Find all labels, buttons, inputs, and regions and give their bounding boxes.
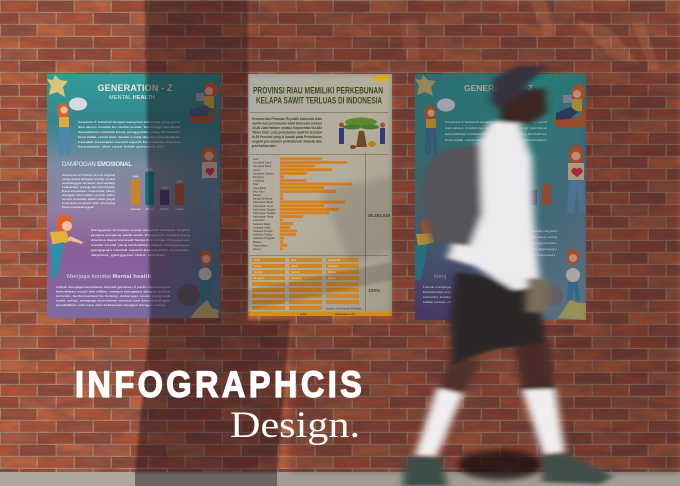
text block: social media: panjang yang (530, 235, 557, 239)
text block: social media: media negatif (530, 229, 557, 233)
subtitle: design: Design. (230, 405, 360, 446)
heading: dampak emosional: DAMPOGAN EMOSIONAL (62, 162, 132, 168)
table of percentages: Jambi (291, 265, 298, 268)
text block: social media (530, 229, 557, 257)
front leg (513, 340, 555, 392)
neck and face (497, 88, 547, 124)
horizontal bar chart: Papua (253, 247, 261, 251)
text block: intro: Tahun 2019. Luas perkebunan sawit ini tersebar (252, 130, 323, 134)
character: girl on sofa (188, 82, 218, 123)
character: girl thinking (424, 105, 438, 155)
text block: intro: Kementerian Pertanian Republik Indonesia telah (252, 117, 322, 121)
horizontal bar chart: Sumatera Barat (253, 164, 271, 168)
bar chart: 44% (146, 168, 153, 172)
icon: star bottom right (190, 300, 219, 318)
table of percentages: Kalimantan (328, 259, 341, 262)
right sock (522, 389, 565, 454)
bar chart: 20% (161, 186, 168, 190)
horizontal bar chart: Maluku (253, 240, 262, 244)
bar chart: Cemas (131, 207, 141, 211)
text block: intro: masalah kesehatan mental seperti kecemasan, depresi (78, 140, 180, 144)
text block: emotional impact: sehingga rentan terhadap (62, 181, 115, 185)
table of percentages: Papua (328, 277, 336, 280)
horizontal bar chart: Sulawesi Barat (253, 222, 271, 226)
text block: social media: gangguan mental seperti kecemasan, kesepian, (91, 248, 190, 252)
icon: speech bubble (69, 98, 87, 110)
total percentage: 100% (368, 288, 381, 294)
horizontal bar chart: Sulawesi Tengah (253, 229, 273, 233)
text block: intro (78, 120, 180, 148)
horizontal bar chart: Jambi (253, 168, 260, 172)
horizontal bar chart: Kalimantan Utara (253, 215, 274, 219)
text block: intro: bisa tidak sehat dari media sosial dapat menimbulkan (78, 135, 180, 139)
text block: emotional impact: Generasi Z hidup di era digital (62, 173, 115, 177)
table of percentages: Aceh (254, 259, 260, 262)
person walking, motion blurred (402, 66, 613, 486)
text block: social media: depresi, gangguan tidur, bahkan (91, 253, 165, 257)
text block: emotional impact (62, 173, 116, 209)
table of percentages: Riau (291, 259, 297, 262)
character: girl pointing (50, 214, 83, 277)
horizontal bar chart: Papua Barat (253, 243, 268, 247)
horizontal bar chart: Kalimantan Selatan (253, 211, 276, 215)
horizontal bar chart: Banten (253, 193, 262, 197)
horizontal bar chart: Riau (253, 182, 259, 186)
horizontal bar chart: Sulawesi Tenggara (253, 236, 275, 240)
pavement (0, 472, 680, 486)
text block: intro: Generasi Z terkenal dengan keinginan teknologi yang pesat (445, 120, 547, 124)
bar chart: 28% (176, 180, 183, 184)
horizontal bar chart: Gorontalo (253, 218, 265, 222)
text block: intro: di 26 Provinsi yang di bawah pada Perkebunan (252, 135, 322, 139)
text block: emotional impact: tekanan yang berdampak (62, 185, 115, 189)
text block: emotional impact: serta mudah lelah dan juga (62, 197, 115, 201)
text block: keeping mental health: tidak sehat, menjaga kesehatan mental dan keseimbangan (56, 298, 170, 302)
shirt (447, 120, 540, 290)
illustration: palm tree and farmers (339, 118, 385, 149)
poster title: KELAPA SAWIT TERLUAS DI INDONESIA (256, 96, 382, 106)
horizontal bar chart: Sumatera Utara (253, 161, 272, 165)
horizontal bar chart: Jawa Barat (253, 186, 266, 190)
horizontal bar chart (250, 112, 388, 311)
text block: keeping mental health (423, 285, 451, 304)
text block: intro: perkebunan (252, 144, 276, 148)
poster title: PROVINSI RIAU MEMILIKI PERKEBUNAN (253, 86, 383, 96)
horizontal bar chart: Lampung (253, 179, 264, 183)
text block: intro: dan akses mudah ke media sosial. Teknologi membuat (445, 126, 547, 130)
text block: intro: kesepian, dan rasa tidak percaya diri (78, 144, 164, 148)
text block: intro (252, 117, 323, 148)
text block: social media: mengganggu (530, 247, 557, 251)
text block: social media (90, 228, 190, 257)
bar chart: Sedih (160, 207, 169, 211)
text block: social media: Gangguan di media sosial memiliki dampak negatif (91, 228, 190, 232)
table of percentages: Bengkulu (254, 277, 265, 280)
heading: menjaga kondisi: Menj (434, 274, 446, 280)
table of percentages: Sumut (254, 265, 262, 268)
poster: generation z (partly hidden) (415, 74, 587, 320)
text block: emotional impact: merasa cemas dan kurang (62, 201, 115, 205)
shorts (450, 272, 547, 365)
right shoe (542, 454, 613, 484)
poster title: GENERATION - Z (464, 83, 533, 93)
horizontal bar chart: Aceh (253, 157, 259, 161)
character: girl with heart (567, 145, 586, 213)
bar chart: Lelah (176, 207, 184, 211)
footer bar: www.sawit.co.id (335, 312, 355, 316)
ground shadow (458, 450, 542, 480)
text block: intro: kemudahan manfaat besar penggunaan yang berlebihan (78, 130, 180, 134)
text block: intro: negara perusahan perkebunan swasta dan (252, 140, 322, 144)
left shoe (402, 457, 448, 486)
table of percentages: Sumsel (291, 271, 300, 274)
icon: gear (543, 286, 563, 306)
character: girl with flower (566, 249, 580, 301)
text block: intro: bisa tidak sehat dari media sosial dapat menimbulkan (445, 138, 547, 142)
character: girl with heart (201, 146, 219, 211)
title: infographcis: INFOGRAPHCIS (75, 364, 362, 405)
poster subtitle: MENTAL HEALTH (109, 95, 155, 101)
text block: keeping mental health (56, 285, 170, 307)
text block: social media: kesepian, (530, 253, 557, 257)
bar chart: 34% (132, 174, 139, 178)
text block: keeping mental health: tertentu, berkonsultasi ke bidang, dukungan sosial yang baik (56, 294, 170, 298)
text block: social media: media sosial yang berlebihan dapat mengganggu (91, 243, 190, 247)
text block: emotional impact: yang dekat dengan media sosial (62, 177, 115, 181)
table of percentages: Sumbar (254, 271, 263, 274)
cap (490, 66, 547, 108)
character: girl with flower (198, 250, 212, 302)
horizontal bar chart: Kalimantan Tengah (253, 207, 276, 211)
text block: intro: dan akses mudah ke media sosial. Teknologi membuat (78, 125, 180, 129)
icon: speech bubble (437, 98, 455, 112)
text block: keeping mental health: keterikatan sosial dan offline, mampu mengatasi dengan konten (56, 290, 170, 294)
poster title (253, 86, 383, 106)
text block: intro: merilis luas perkebunan sawit Indonesia sebesar (252, 122, 323, 126)
icon: star top left (47, 75, 68, 97)
horizontal bar chart: Bengkulu (253, 175, 264, 179)
text block: intro (445, 120, 547, 142)
bar chart (528, 184, 551, 205)
horizontal bar chart: Sumatera Selatan (253, 171, 274, 175)
text block: intro: kemudahan manfaat besar penggunaan yang berlebihan (445, 132, 547, 136)
horizontal bar chart: Kalimantan Timur (253, 204, 273, 208)
text block: keeping mental health: Untuk menjaga kesehatan mental generasi Z perlu membangun (56, 285, 170, 289)
text block: keeping mental health: Untuk menjaga (423, 285, 451, 289)
horizontal bar chart: Bangka Belitung (253, 197, 272, 201)
character: girl thinking (57, 103, 71, 155)
table of percentages: Lampung (291, 277, 302, 280)
left sock (415, 388, 463, 456)
text block: social media: diterima dapat merusak harga diri remaja. Penggunaan (91, 238, 190, 242)
icon: star top left (415, 75, 436, 96)
text block: intro: Generasi Z terkenal dengan keinginan teknologi yang pesat (78, 120, 180, 124)
text block: social media: Penggunaan (530, 241, 557, 245)
text block: social media: jangka panjang pada anak. Pengaruh negatif yang (90, 233, 190, 237)
table of percentages: Sulawesi (328, 265, 338, 268)
text block: emotional impact: kesehatan mental dan (62, 189, 115, 193)
horizontal bar chart: Sulawesi Selatan (253, 233, 273, 237)
bar chart (131, 168, 184, 211)
icon: star bottom right (558, 300, 586, 320)
horizontal bar chart: Kalimantan Barat (253, 200, 273, 204)
table of percentages: Sumber: Kementerian Pertanian (326, 308, 362, 310)
text block: intro: 16,38 Juta Hektare melalui Kepmentan No.833 (252, 126, 322, 130)
text block: keeping mental health: tertentu, berko (423, 295, 451, 299)
horizontal bar chart: Kep. Riau (253, 189, 265, 193)
poster title: GENERATION - Z (98, 83, 173, 93)
year tag (374, 75, 389, 81)
text block: keeping mental health: pendidikan self-care dan kebiasaan bergaul dengan orang. (56, 303, 166, 307)
backpack (419, 144, 482, 246)
text block: emotional impact: bersemangat (62, 205, 94, 209)
text block: keeping mental health: tidak sehat, m (423, 300, 451, 304)
table of percentages (252, 258, 362, 310)
text block: emotional impact: dengan kesulitan untuk tidur (62, 193, 116, 197)
footer bar: sawit (300, 312, 307, 316)
text block: keeping mental health: keterikatan sos (423, 290, 451, 294)
footer bar (248, 312, 392, 316)
table of percentages: Maluku (328, 271, 337, 274)
horizontal bar chart: Sulawesi Utara (253, 225, 271, 229)
character: girl pointing (415, 217, 435, 280)
poster: riau palm oil plantation (248, 74, 392, 316)
hand (527, 278, 548, 312)
character: girl on sofa (553, 84, 587, 127)
heading: menjaga kondisi mental health: Menjaga kondisi Mental health (67, 274, 152, 280)
bar chart: Stres (146, 207, 154, 211)
total value: 35.181.019 (368, 213, 391, 218)
icon: gear (178, 284, 200, 306)
back leg (438, 360, 482, 392)
poster: generation z mental health (47, 74, 220, 318)
